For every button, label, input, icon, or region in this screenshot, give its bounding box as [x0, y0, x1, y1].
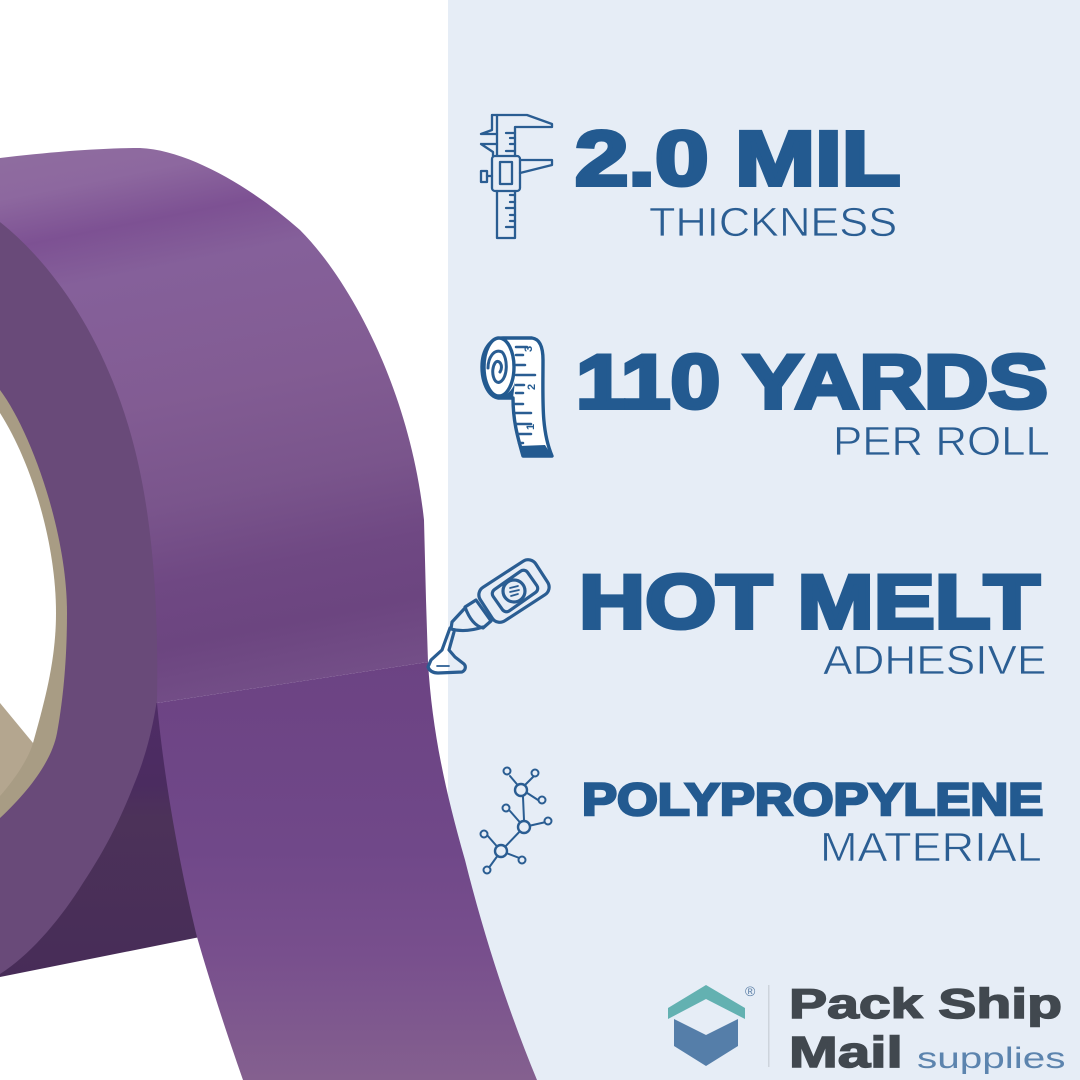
- logo: Pack Ship Mail supplies: supplies: [917, 1041, 1066, 1075]
- row: length: [482, 338, 1050, 464]
- tape outer surface lower: [157, 662, 537, 1080]
- icon: tape measure: [482, 338, 552, 456]
- tape front face: [0, 222, 157, 974]
- icon: caliper: [481, 115, 552, 238]
- icon: glue bottle: [428, 556, 553, 673]
- tape outer surface upper: [0, 148, 428, 703]
- tape roll photo: [0, 148, 537, 1080]
- icon: tape measure: 1: [525, 424, 537, 430]
- label: THICKNESS: THICKNESS: [649, 199, 897, 245]
- heading: HOT MELT: HOT MELT: [579, 559, 1040, 644]
- icon: molecule: [480, 768, 552, 874]
- logo: Pack Ship Mail supplies: [668, 980, 1066, 1076]
- logo mark: box: [668, 985, 745, 1066]
- cardboard core ring: [0, 390, 67, 818]
- registered mark: ®: [745, 983, 756, 999]
- icon: tape measure: 2: [526, 384, 538, 390]
- row: adhesive: [428, 556, 1046, 684]
- tape inner shadow: [0, 700, 200, 977]
- logo wordmark: Pack Ship: [789, 980, 1062, 1027]
- icon: tape measure: 3: [523, 346, 535, 352]
- core hole: [0, 413, 56, 743]
- label: ADHESIVE: ADHESIVE: [823, 637, 1046, 684]
- logo: Pack Ship Mail supplies: Mail: [789, 1027, 903, 1076]
- label: PER ROLL: PER ROLL: [833, 418, 1050, 464]
- core inside: [0, 703, 33, 796]
- label: MATERIAL: MATERIAL: [820, 825, 1042, 871]
- row: thickness: [481, 115, 900, 245]
- row: material: [480, 768, 1043, 874]
- heading: 110 YARDS: 110 YARDS: [576, 339, 1048, 424]
- background panel: [448, 0, 1080, 1080]
- heading: POLYPROPYLENE: POLYPROPYLENE: [582, 775, 1043, 825]
- heading: 2.0 MIL: 2.0 MIL: [575, 116, 900, 202]
